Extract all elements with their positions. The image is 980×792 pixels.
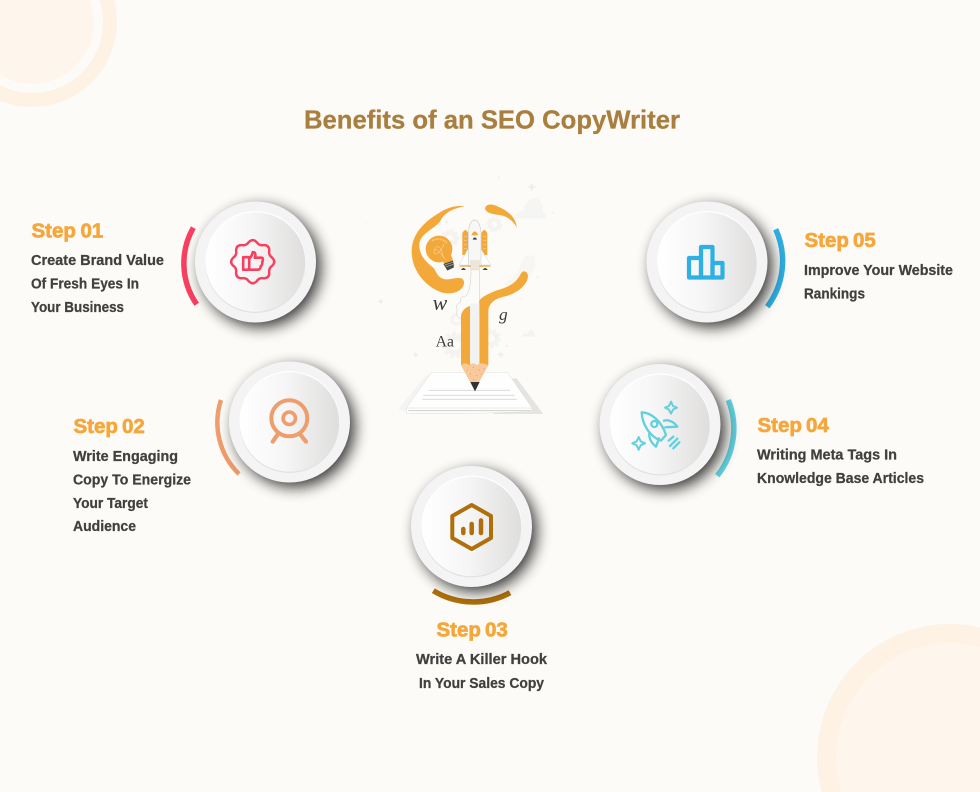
icon: thumbs up badge [231,240,274,283]
orange swirl around bulb [412,206,465,293]
step 01 text: Your Business [31,300,124,316]
step 01 text [31,220,164,316]
arc: step 04 [717,400,734,476]
step 03 button [411,466,536,602]
step 05 text: Step [804,229,849,252]
step 04 text [757,414,924,487]
step 04 text: Writing Meta Tags In [757,448,897,464]
step 02 button [217,362,354,487]
step 04 text: 04 [806,414,829,437]
background gears and clouds [365,176,554,358]
step 01 text: Of Fresh Eyes In [31,276,139,292]
icon: hexagon chart [452,505,491,549]
step 05 text: 05 [853,229,876,252]
step 04 text: Step [758,414,802,437]
title: Benefits of an SEO CopyWriter [304,104,680,134]
step 02 text: Your Target [73,496,148,512]
pencil tip [461,363,488,387]
step 04 text: Knowledge Base Articles [757,471,924,487]
step 03 text: 03 [485,618,508,642]
light bulb [426,236,455,271]
step 01 button [184,202,320,327]
typography letters: Aa [436,334,454,351]
step 04 button [600,364,734,490]
step 05 text: Rankings [804,286,865,302]
step 02 text: Audience [73,519,136,535]
orange swirl top right [485,205,517,227]
smoke trail [456,268,479,318]
decorative circle: top left [0,0,117,107]
step 02 text: Step [74,415,118,438]
step 03 text: Step [436,618,481,642]
icon: rocket with sparkles [632,402,679,450]
step 05 text [804,229,953,302]
arc: step 02 [217,400,239,474]
step 02 text: Write Engaging [73,449,178,465]
step 03 text [416,618,548,692]
arc: step 03 [433,591,510,602]
icon: bar chart [689,247,722,278]
step 01 text: Create Brand Value [31,253,164,269]
step 03 text: In Your Sales Copy [419,676,544,692]
pencil body [461,271,528,367]
paper stack [398,372,543,414]
step 05 button [646,202,783,327]
step 02 text: 02 [122,415,145,438]
typography letters: w [433,290,448,315]
decorative circle: bottom right [817,624,980,792]
space shuttle rocket [459,220,491,270]
typography letters [433,290,508,351]
arc: step 05 [767,229,783,307]
step 01 text: 01 [80,220,103,242]
arc: step 01 [184,228,197,304]
step 02 text [73,415,191,535]
central illustration: pencil and rocket [365,176,554,414]
step 01 text: Step [32,220,76,242]
typography letters: g [499,305,508,324]
icon: target [271,400,307,442]
step 03 text: Write A Killer Hook [416,652,548,668]
step 05 text: Improve Your Website [804,263,953,279]
step 02 text: Copy To Energize [73,472,191,488]
